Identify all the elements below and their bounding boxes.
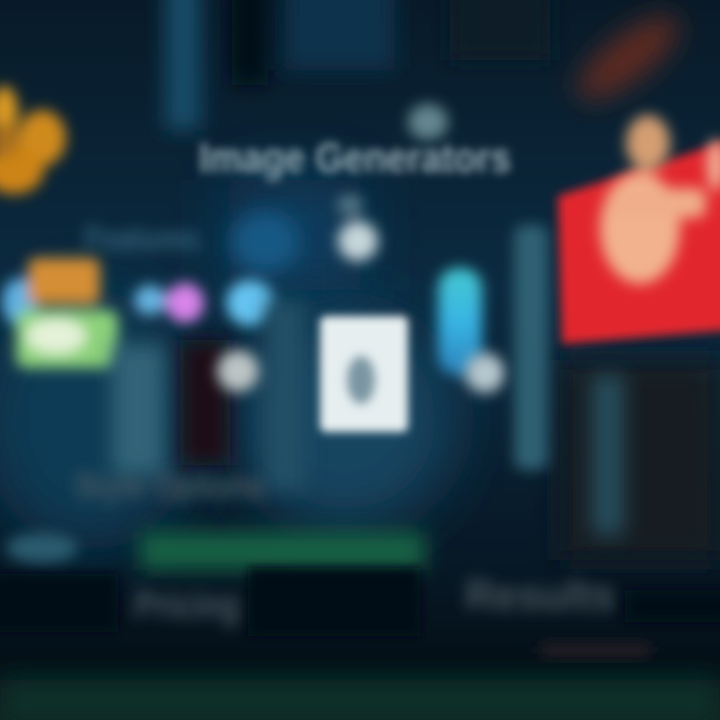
text block: bottom centre-left: Pricing xyxy=(134,583,240,627)
label: far left xyxy=(6,533,78,563)
panel: black bar centre xyxy=(248,568,420,636)
panel: white card xyxy=(320,316,408,432)
panel: red poster xyxy=(558,115,720,344)
panel: black bar left xyxy=(0,574,118,632)
top right decoration xyxy=(566,2,690,114)
column: left pale xyxy=(112,345,164,475)
icon: orange flower xyxy=(0,86,66,194)
text block: lower left: Style Options xyxy=(75,465,265,506)
title: Image Generators xyxy=(199,134,511,181)
column: right pale xyxy=(592,375,624,535)
icon: title emblem xyxy=(408,104,448,140)
icon: white blob xyxy=(217,350,259,392)
column: teal xyxy=(514,225,548,470)
text block: bottom right: Results xyxy=(465,571,615,620)
icon: light blue dot xyxy=(226,280,274,326)
top vertical bands xyxy=(165,0,550,130)
icon: white dot below title xyxy=(337,195,378,261)
accent: bottom red strip xyxy=(540,645,650,655)
icon: cyan bar xyxy=(438,268,482,376)
column: centre pale xyxy=(265,300,305,490)
panel: app icon card xyxy=(2,258,118,368)
green strip xyxy=(140,532,425,570)
icon: blue and pink dots xyxy=(134,283,204,323)
icon: blue glow xyxy=(231,212,299,272)
icon: pale blob xyxy=(465,353,505,393)
label: left heading: Features xyxy=(84,220,200,258)
dark column xyxy=(180,340,230,465)
panel: black bar right xyxy=(625,590,720,622)
